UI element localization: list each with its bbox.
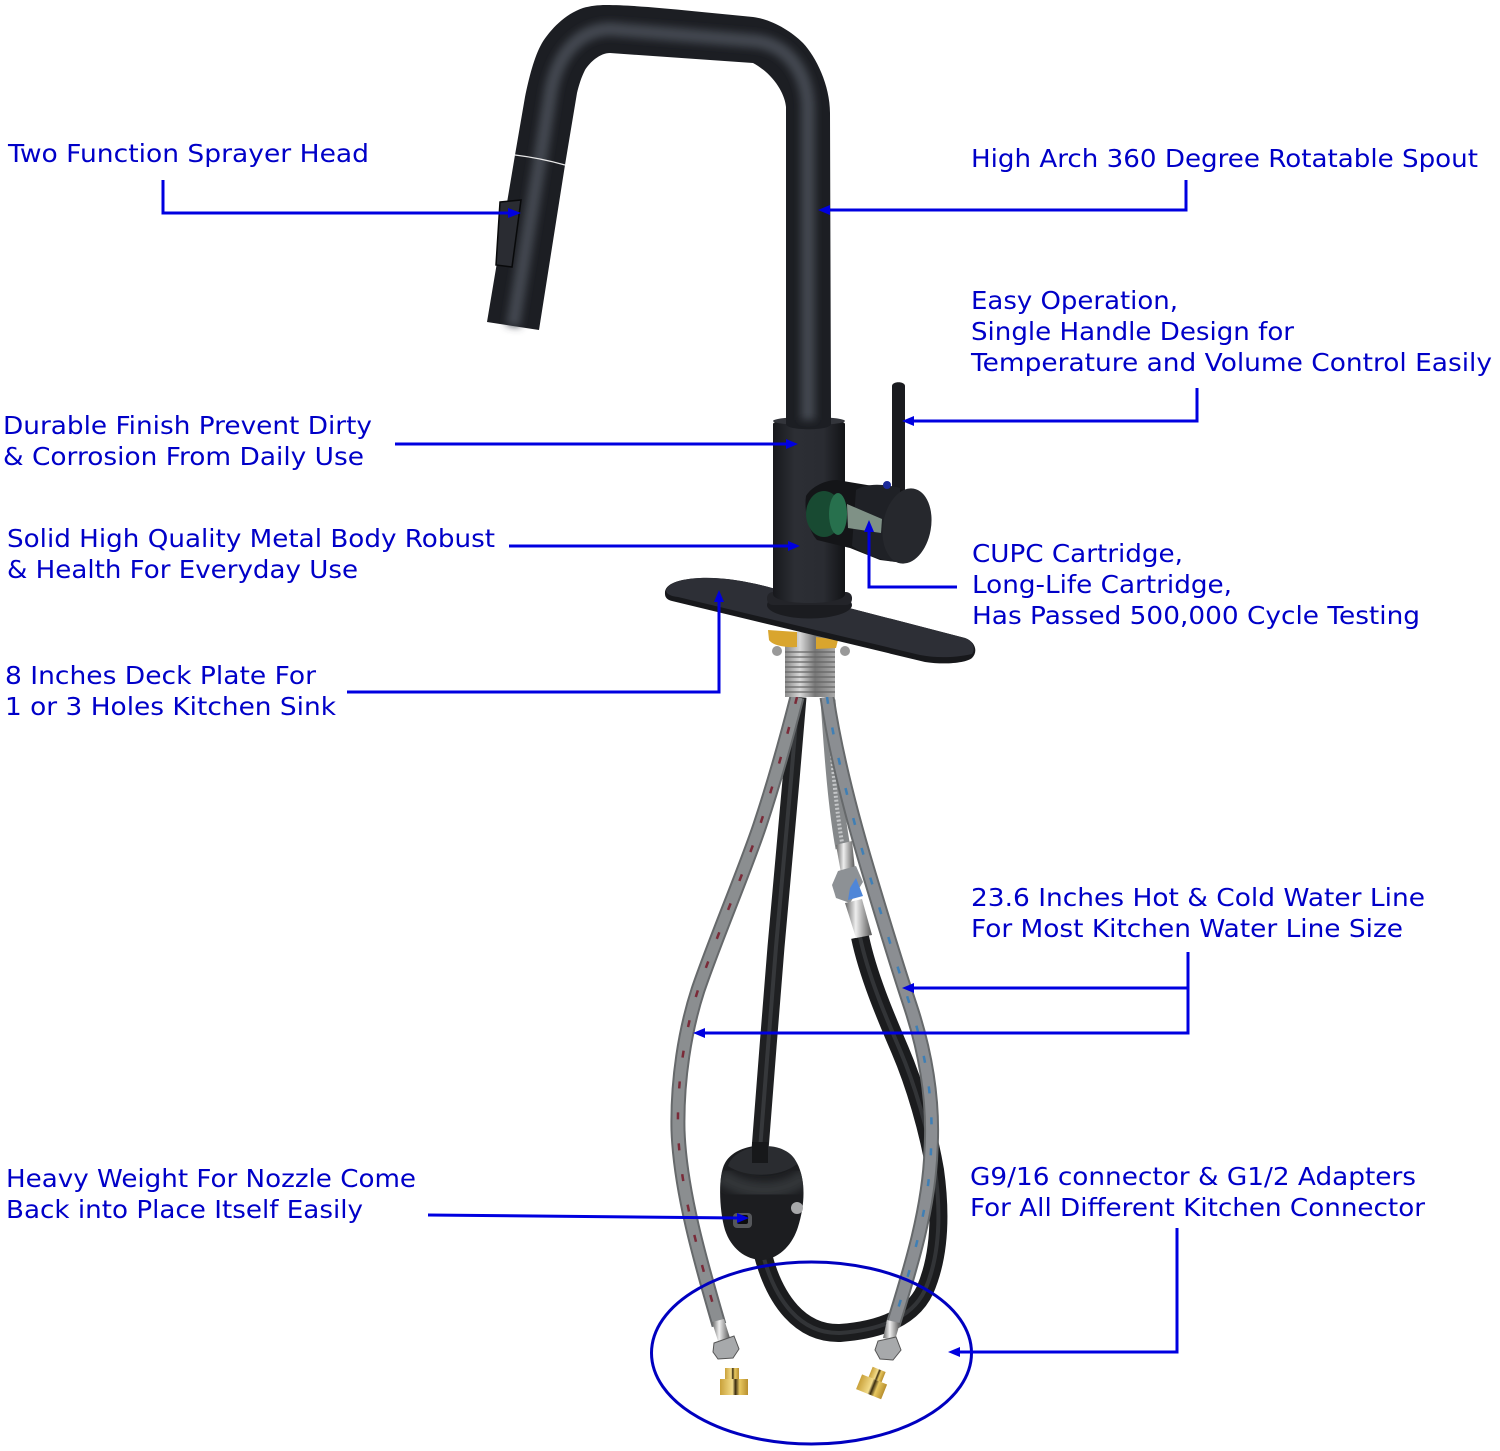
arrow: connectors [948,1228,1177,1357]
callout ellipse around connectors [652,1262,972,1444]
label: sprayer head: Two Function Sprayer Head [7,139,369,168]
label: cartridge: CUPC Cartridge, [972,539,1183,568]
heavy weight [720,1142,806,1260]
hot water hose (red stripe) [678,697,797,1325]
label: connectors [970,1162,1426,1222]
label: metal body: & Health For Everyday Use [7,555,358,584]
handle and cartridge [805,480,937,568]
arrow: heavy weight [428,1213,749,1223]
label: water line: For Most Kitchen Water Line Size [971,914,1403,943]
black pull-down hose centre [760,697,798,1150]
arrow: handle [902,388,1197,426]
black pull-down hose loop [763,700,938,1333]
arrows: water lines [693,952,1188,1038]
label: connectors: For All Different Kitchen Connector [970,1193,1426,1222]
label: heavy weight [6,1164,416,1224]
label: easy operation: Single Handle Design for [971,317,1295,346]
sprayer trigger [496,200,521,267]
label: cartridge [972,539,1420,630]
brass adapter left [720,1368,748,1395]
quick connector with blue clip [832,841,872,938]
threaded shank [768,630,850,697]
high arch spout and sprayer head [487,5,831,429]
label: heavy weight: Back into Place Itself Easily [6,1195,363,1224]
cold water hose (blue stripe) [827,697,932,1325]
deck plate [665,578,975,663]
label: durable finish: Durable Finish Prevent Dirty [3,411,372,440]
label: spout: High Arch 360 Degree Rotatable Spout [971,144,1478,173]
connector nut left [712,1319,739,1359]
label: easy operation: Easy Operation, [971,286,1178,315]
label: deck plate [5,661,337,721]
arrow: durable finish [395,439,798,449]
handle lever [892,382,905,495]
arrow: sprayer head [163,180,521,218]
label: easy operation: Temperature and Volume Control Easily [970,348,1492,377]
label: cartridge: Long-Life Cartridge, [972,570,1232,599]
label: water line: 23.6 Inches Hot & Cold Water Line [971,883,1425,912]
label: water line [971,883,1425,943]
arrow: cartridge [864,520,957,587]
label: heavy weight: Heavy Weight For Nozzle Come [6,1164,416,1193]
label: durable finish [3,411,372,471]
faucet body [767,417,852,618]
label: deck plate: 1 or 3 Holes Kitchen Sink [5,692,337,721]
label: deck plate: 8 Inches Deck Plate For [5,661,317,690]
arrow: metal body [509,541,800,551]
label: metal body [7,524,495,584]
label: cartridge: Has Passed 500,000 Cycle Testing [972,601,1420,630]
label: connectors: G9/16 connector & G1/2 Adapters [970,1162,1416,1191]
brass adapter right [856,1364,891,1399]
arrow: spout [818,180,1186,215]
label: durable finish: & Corrosion From Daily Use [3,442,364,471]
sprayer seam [515,155,565,165]
arrow: deck plate [347,590,724,692]
faucet product illustration [487,5,975,1399]
connector nut right [875,1320,901,1360]
label: easy operation [970,286,1492,377]
green cartridge [806,491,882,537]
label: metal body: Solid High Quality Metal Body Robust [7,524,495,553]
